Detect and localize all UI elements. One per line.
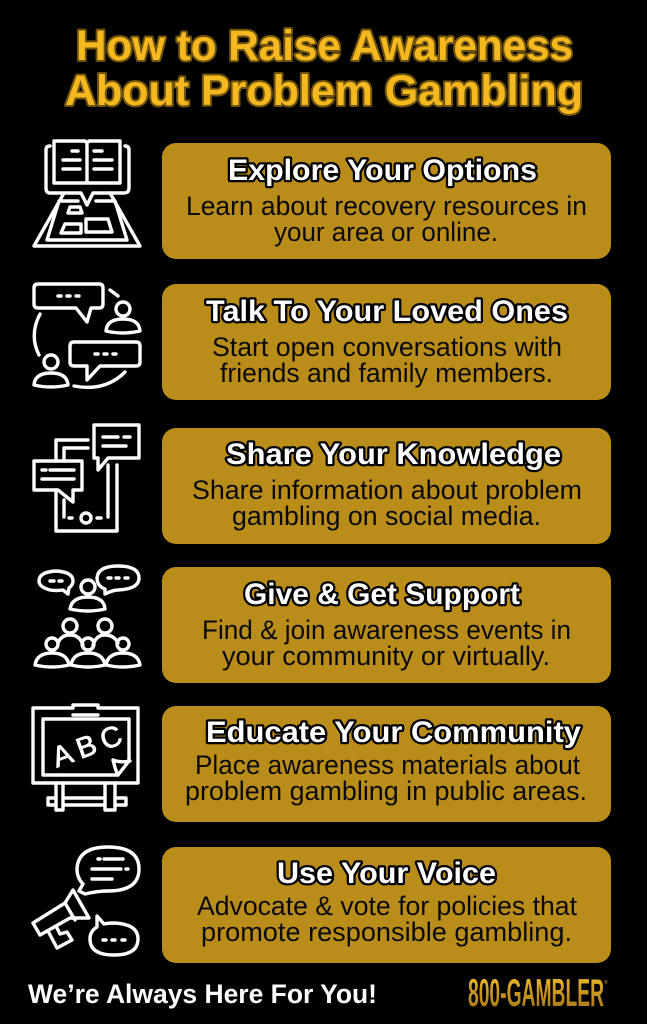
heading: give and get support: Give & Get Support — [244, 578, 520, 611]
panel: give and get support — [162, 567, 611, 683]
text: voice description — [197, 891, 577, 947]
text: support description: Find & join awareness events in — [202, 615, 571, 645]
text: explore description — [186, 191, 587, 247]
text: talk description: Start open conversations with — [212, 332, 562, 362]
text: explore description: Learn about recovery resources in — [186, 191, 587, 221]
heading: explore your options: Explore Your Options — [228, 154, 537, 187]
icon: open book over map — [34, 141, 140, 246]
panel: talk to your loved ones — [162, 284, 611, 400]
text: voice description: promote responsible gambling. — [201, 917, 572, 947]
panel: use your voice — [162, 847, 611, 963]
heading: educate your community: Educate Your Community — [206, 716, 581, 749]
icon: easel with abc board — [33, 705, 138, 810]
text: support description — [202, 615, 571, 671]
text: share description: gambling on social media. — [232, 501, 541, 531]
text: talk description — [212, 332, 562, 388]
text: share description: Share information about problem — [192, 475, 582, 505]
text: talk description: friends and family members. — [220, 358, 553, 388]
logo: 800-gambler: ® — [604, 979, 608, 986]
panel: explore your options — [162, 143, 611, 259]
panel: share your knowledge — [162, 428, 611, 544]
icon: group of people talking — [35, 566, 140, 667]
text: voice description: Advocate & vote for policies that — [197, 891, 577, 921]
text: share description — [192, 475, 582, 531]
icon: megaphone with speech bubbles — [33, 847, 139, 955]
heading: talk to your loved ones: Talk To Your Loved Ones — [206, 295, 568, 328]
title: How to Raise Awareness — [76, 22, 573, 70]
text: explore description: your area or online. — [274, 217, 498, 247]
footer tagline: We’re Always Here For You! — [28, 979, 377, 1009]
title: About Problem Gambling — [65, 67, 583, 115]
heading: use your voice: Use Your Voice — [277, 857, 496, 890]
icon: phone with chat bubbles — [34, 425, 139, 531]
text: educate description — [185, 750, 587, 806]
title — [65, 22, 583, 115]
abc lettering: ABC — [48, 720, 127, 774]
text: educate description: Place awareness materials about — [195, 750, 580, 780]
icon: conversation between two people — [34, 284, 140, 387]
heading: share your knowledge: Share Your Knowledge — [226, 438, 561, 471]
panel: educate your community — [162, 706, 611, 822]
text: support description: your community or virtually. — [222, 641, 550, 671]
text: educate description: problem gambling in public areas. — [185, 776, 587, 806]
